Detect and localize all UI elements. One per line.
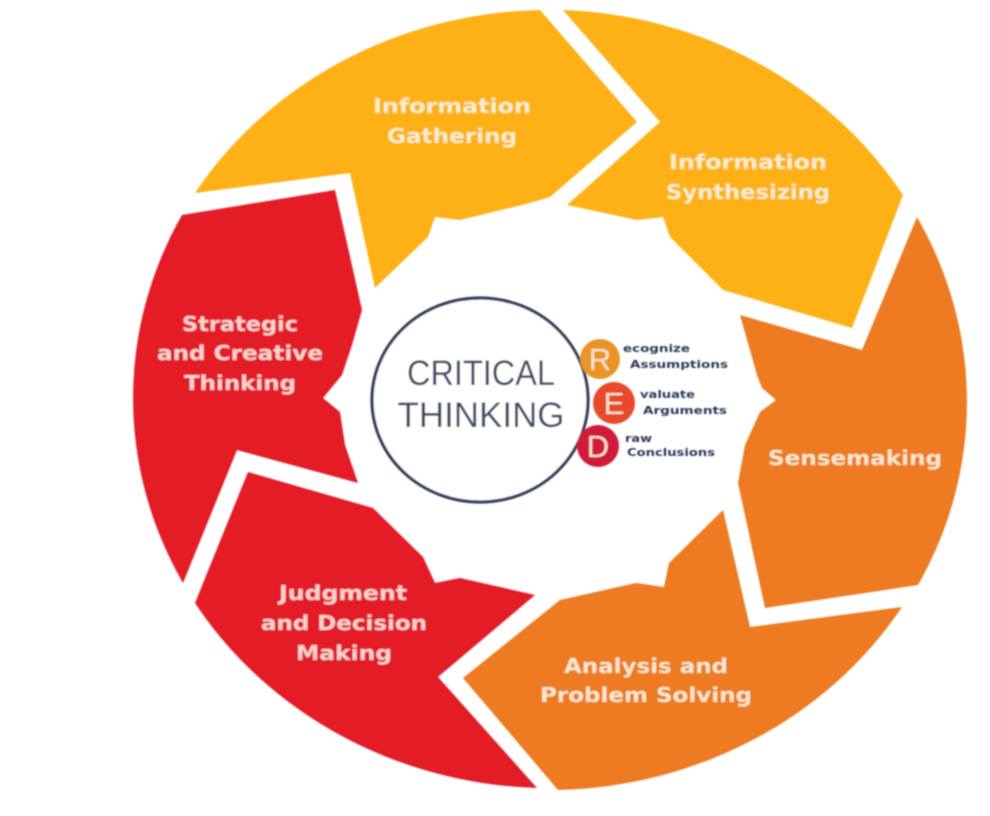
segment: Judgment and Decision Making	[195, 472, 537, 788]
segment: Strategic and Creative Thinking	[133, 190, 362, 583]
segment: Information Gathering: Gathering	[387, 124, 517, 148]
RED item: Evaluate Arguments: Arguments	[643, 404, 728, 417]
segment: Strategic and Creative Thinking: Thinking	[184, 371, 296, 395]
segment: Analysis and Problem Solving: Analysis and	[564, 654, 728, 678]
RED item: Evaluate Arguments: valuate	[640, 388, 695, 401]
segment: Judgment and Decision Making: Judgment	[277, 581, 408, 605]
RED item: Recognize Assumptions: R	[589, 342, 611, 377]
segment: Information Synthesizing: Synthesizing	[666, 180, 830, 204]
center circle: Critical Thinking: CRITICAL	[407, 354, 555, 393]
segment: Information Synthesizing: Information	[669, 150, 827, 174]
segment: Sensemaking: Sensemaking	[768, 446, 942, 470]
segment: Strategic and Creative Thinking: Strategic	[182, 312, 298, 336]
RED item: Recognize Assumptions	[580, 339, 729, 379]
segment: Analysis and Problem Solving: Problem Solving	[540, 683, 752, 707]
segment: Strategic and Creative Thinking: and Creative	[157, 341, 323, 365]
segment: Analysis and Problem Solving	[463, 510, 902, 790]
RED item: Draw Conclusions: D	[587, 429, 609, 464]
segment: Judgment and Decision Making: Making	[296, 641, 392, 665]
center circle: Critical Thinking	[372, 298, 588, 502]
RED item: Draw Conclusions: raw	[625, 432, 652, 445]
RED item: Draw Conclusions: Conclusions	[627, 446, 716, 459]
segment: Information Gathering	[195, 10, 637, 288]
segment: Information Synthesizing	[563, 10, 903, 328]
RED item: Evaluate Arguments: E	[604, 386, 624, 421]
center circle: Critical Thinking: THINKING	[398, 396, 564, 435]
RED item: Recognize Assumptions: ecognize	[623, 342, 690, 355]
segment: Sensemaking	[738, 217, 967, 608]
segment: Judgment and Decision Making: and Decision	[261, 611, 427, 635]
RED item: Recognize Assumptions: Assumptions	[630, 358, 729, 371]
segment: Information Gathering: Information	[373, 94, 531, 118]
RED item: Evaluate Arguments	[593, 382, 728, 424]
RED item: Draw Conclusions	[577, 425, 716, 467]
